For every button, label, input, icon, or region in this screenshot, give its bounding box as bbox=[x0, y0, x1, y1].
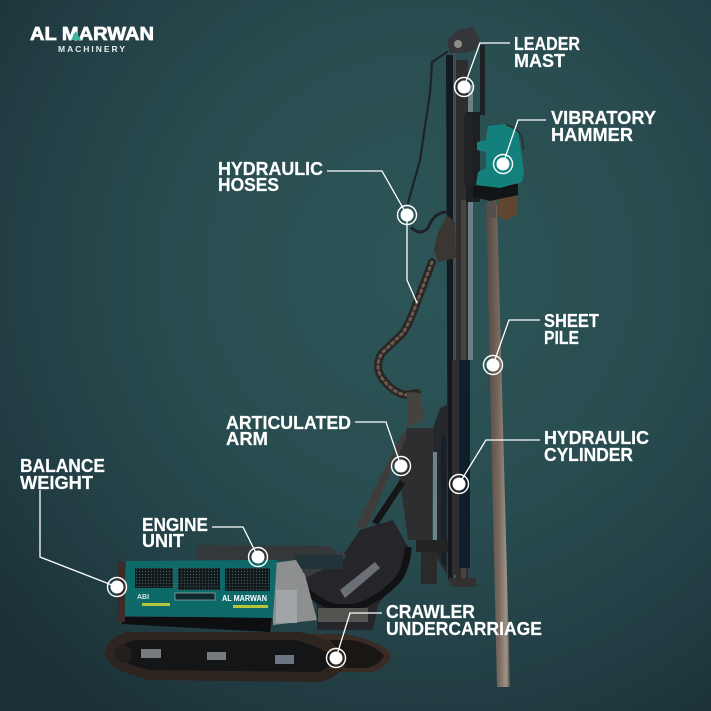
label: hydraulic cylinder: HYDRAULIC bbox=[544, 428, 649, 448]
leader mast bbox=[446, 27, 485, 587]
engine unit bbox=[117, 545, 343, 632]
label: crawler undercarriage: UNDERCARRIAGE bbox=[386, 619, 542, 639]
label: vibratory hammer: VIBRATORY bbox=[551, 108, 656, 128]
vibratory hammer bbox=[473, 124, 524, 221]
logo: MACHINERY bbox=[58, 44, 125, 54]
label: engine unit: ENGINE bbox=[142, 515, 208, 535]
label: leader mast: MAST bbox=[514, 51, 565, 71]
marker: hydraulic cylinder bbox=[450, 474, 468, 494]
label: balance weight: WEIGHT bbox=[20, 473, 93, 493]
label: articulated arm bbox=[226, 413, 351, 449]
engine unit: AL MARWAN bbox=[222, 594, 267, 603]
label: leader mast bbox=[514, 34, 580, 71]
sheet pile bbox=[486, 205, 510, 687]
label: sheet pile: PILE bbox=[544, 328, 579, 348]
label: balance weight bbox=[20, 456, 105, 493]
engine unit: ABI bbox=[137, 594, 149, 601]
marker: engine unit bbox=[248, 548, 268, 566]
label: engine unit: UNIT bbox=[142, 531, 184, 551]
label: hydraulic hoses: HYDRAULIC bbox=[218, 159, 323, 179]
label: crawler undercarriage: CRAWLER bbox=[386, 602, 475, 622]
label: vibratory hammer: HAMMER bbox=[551, 125, 633, 145]
leader lines bbox=[40, 43, 546, 658]
marker: crawler undercarriage bbox=[326, 648, 346, 668]
marker: leader mast bbox=[454, 78, 474, 96]
label: balance weight: BALANCE bbox=[20, 456, 105, 476]
hydraulic hoses bbox=[378, 52, 456, 395]
label: leader mast: LEADER bbox=[514, 34, 580, 54]
label: crawler undercarriage bbox=[386, 602, 542, 639]
label: hydraulic hoses bbox=[218, 159, 323, 195]
marker: vibratory hammer bbox=[494, 154, 512, 174]
label: hydraulic hoses: HOSES bbox=[218, 175, 279, 195]
articulated arm bbox=[302, 392, 448, 630]
label: sheet pile bbox=[544, 311, 599, 348]
logo: AL MARWAN bbox=[30, 24, 154, 44]
label: articulated arm: ARTICULATED bbox=[226, 413, 351, 433]
label: engine unit bbox=[142, 515, 208, 551]
label: articulated arm: ARM bbox=[226, 429, 268, 449]
label: hydraulic cylinder: CYLINDER bbox=[544, 445, 633, 465]
marker: balance weight bbox=[108, 578, 126, 596]
marker: sheet pile bbox=[484, 356, 502, 374]
marker: hydraulic hoses bbox=[398, 206, 416, 224]
logo bbox=[30, 24, 154, 54]
marker: articulated arm bbox=[392, 456, 410, 476]
label: vibratory hammer bbox=[551, 108, 656, 145]
label: sheet pile: SHEET bbox=[544, 311, 599, 331]
label: hydraulic cylinder bbox=[544, 428, 649, 465]
crawler undercarriage bbox=[104, 632, 391, 682]
